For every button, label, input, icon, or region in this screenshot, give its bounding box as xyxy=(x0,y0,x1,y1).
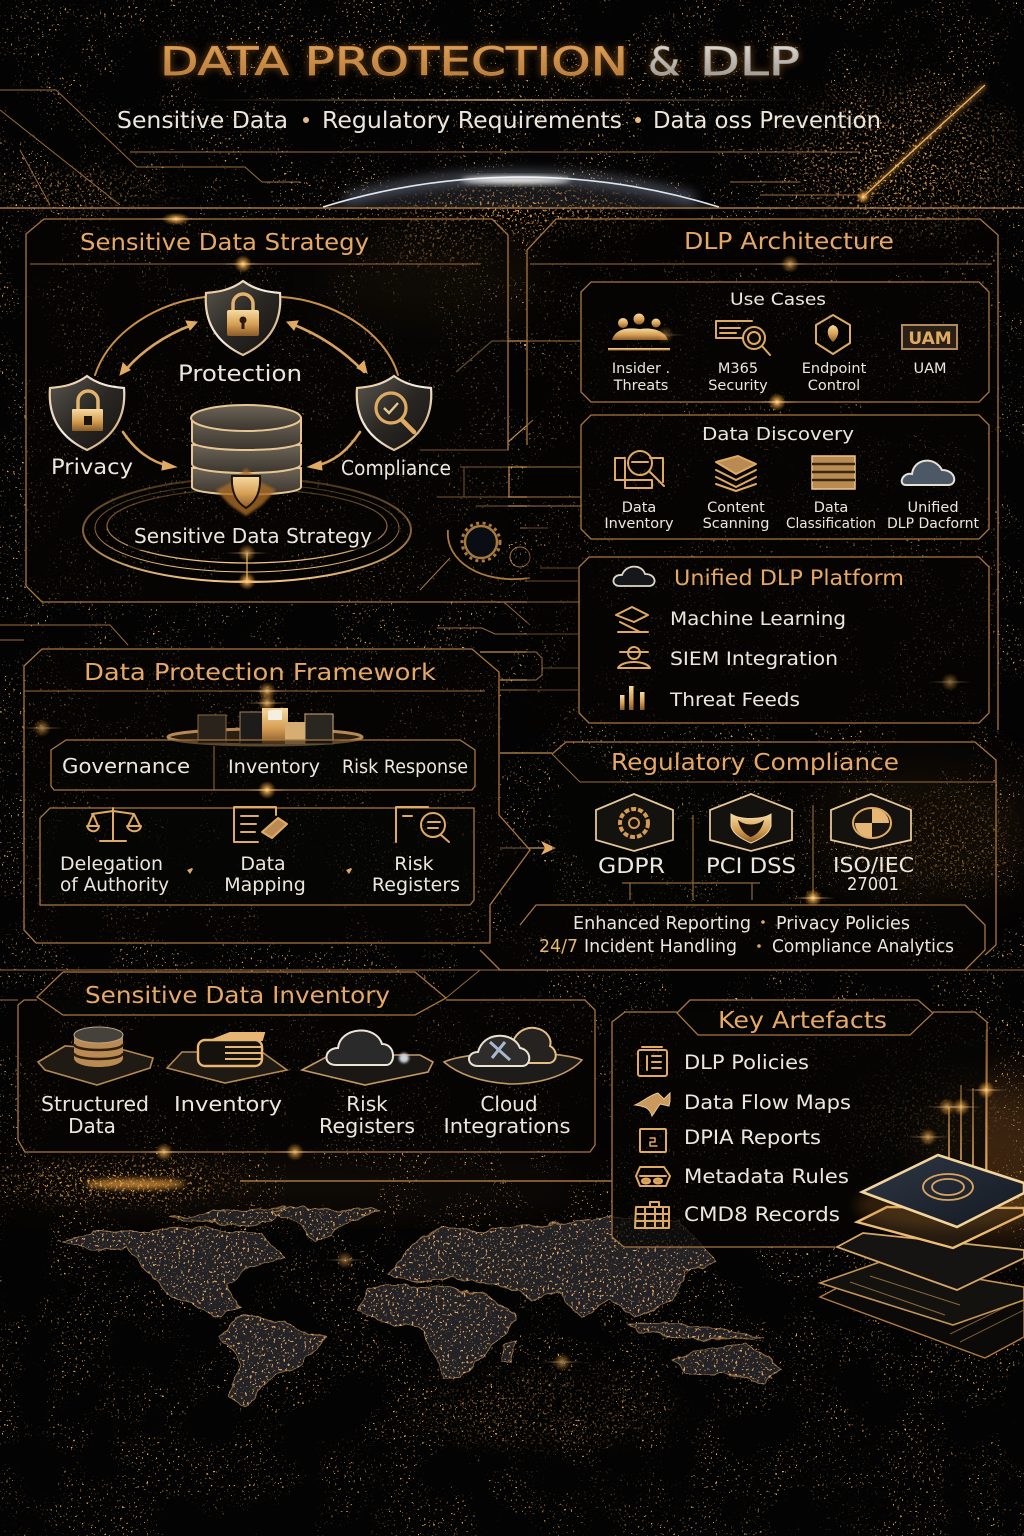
label: insider threats: Insider . xyxy=(612,361,670,377)
icon: insider threats xyxy=(608,314,670,350)
label: insider threats: Threats xyxy=(613,378,668,394)
badge: iso xyxy=(831,794,911,849)
label: gdpr: GDPR xyxy=(598,854,665,878)
label: risk registers: Registers xyxy=(319,1114,415,1138)
subtitle: Data oss Prevention xyxy=(653,108,881,134)
label: iso: ISO/IEC xyxy=(833,853,914,877)
label: risk registers: Risk xyxy=(394,853,434,875)
label: inventory: Inventory xyxy=(228,756,320,778)
icon: database xyxy=(191,405,301,494)
label: data classification: Classification xyxy=(786,516,876,532)
label: policies: DLP Policies xyxy=(684,1051,809,1074)
icon: privacy shield xyxy=(50,376,124,450)
icon: clouds on plinth xyxy=(444,1028,582,1084)
circuit lines xyxy=(0,90,1024,1181)
icon: database on plinth xyxy=(38,1027,153,1085)
eurasia xyxy=(388,1217,714,1317)
label: delegation: of Authority xyxy=(60,874,169,896)
title: DATA PROTECTION xyxy=(160,40,628,85)
text: second line xyxy=(539,937,954,957)
arrow: framework to compliance xyxy=(541,841,556,855)
icon: cloud xyxy=(902,461,954,485)
label: privacy: Privacy xyxy=(51,455,133,479)
label: data inventory: Inventory xyxy=(604,516,674,532)
heading: Key Artefacts xyxy=(718,1008,887,1034)
icon: dpia xyxy=(640,1129,666,1152)
label: unified: DLP Dacfornt xyxy=(887,516,979,532)
icon: uam badge xyxy=(902,325,957,349)
subpanel: unified dlp platform xyxy=(579,557,989,723)
label: risk registers: Registers xyxy=(372,874,460,896)
layer 3 xyxy=(837,1233,1024,1290)
text: second line: Incident Handling xyxy=(584,937,737,957)
layer 4 xyxy=(820,1262,1024,1325)
heading: Sensitive Data Inventory xyxy=(85,983,390,1009)
title: DLP xyxy=(700,40,800,85)
icon: cloud xyxy=(613,567,655,586)
layer 1 xyxy=(862,1155,1024,1227)
heading: Unified DLP Platform xyxy=(674,566,904,590)
islands xyxy=(503,1323,765,1362)
icon: endpoint xyxy=(816,315,850,354)
cycle arrows xyxy=(95,297,398,470)
subpanel: use cases xyxy=(581,282,989,411)
heading: DLP Architecture xyxy=(684,229,894,255)
heading: Data Protection Framework xyxy=(84,660,437,686)
illustration: document stacks xyxy=(168,694,362,745)
label: metadata: Metadata Rules xyxy=(684,1165,849,1188)
icon: metadata xyxy=(636,1167,670,1186)
label: content scanning: Scanning xyxy=(703,516,769,532)
text: first line xyxy=(573,914,910,934)
label: m365: Security xyxy=(708,378,768,394)
label: content scanning: Content xyxy=(707,500,765,516)
icon: machine learning xyxy=(616,607,648,632)
heading: Regulatory Compliance xyxy=(611,750,899,776)
icon: gear xyxy=(420,523,530,590)
icon: siem xyxy=(618,647,650,668)
label: 27001: 27001 xyxy=(847,874,899,895)
text: second line: Compliance Analytics xyxy=(772,937,954,957)
south america xyxy=(219,1315,325,1407)
text: second line: 24/7 xyxy=(539,937,578,957)
label: uam: UAM xyxy=(913,361,947,377)
row: governance, inventory, risk response xyxy=(51,740,475,799)
text: first line: Privacy Policies xyxy=(776,914,910,934)
panel: data protection framework xyxy=(24,649,530,943)
label: structured data: Data xyxy=(68,1114,116,1138)
icon: cloud on plinth xyxy=(302,1031,433,1085)
comet streak xyxy=(856,85,985,204)
label: cmdb: CMD8 Records xyxy=(684,1203,840,1226)
decorative sparks xyxy=(20,326,972,1371)
icon: database badge xyxy=(216,468,276,516)
earth horizon xyxy=(323,176,719,272)
subtitle: Regulatory Requirements xyxy=(322,108,622,134)
icon: threat feeds xyxy=(620,686,644,710)
icon: m365 xyxy=(716,321,770,355)
panel: sensitive data inventory xyxy=(18,972,595,1161)
icon: data inventory xyxy=(615,451,664,488)
orbit rings xyxy=(83,478,411,582)
icon: book on plinth xyxy=(167,1033,287,1083)
subtitle xyxy=(117,108,881,134)
icon: scales xyxy=(87,808,141,841)
label: machine learning: Machine Learning xyxy=(670,608,846,630)
subtitle: Sensitive Data xyxy=(117,108,288,134)
australia xyxy=(673,1343,780,1385)
panel: regulatory compliance xyxy=(480,742,996,970)
icon: cmdb xyxy=(635,1202,669,1228)
arctic and greenland xyxy=(168,1207,380,1242)
label: threat feeds: Threat Feeds xyxy=(669,689,800,711)
title xyxy=(160,40,800,85)
panel: key artefacts xyxy=(612,1000,987,1247)
text: first line: Enhanced Reporting xyxy=(573,914,751,934)
label: data inventory: Data xyxy=(622,500,656,516)
label: pci dss: PCI DSS xyxy=(706,854,796,878)
label: cloud integrations: Integrations xyxy=(444,1114,570,1138)
label: centre: Sensitive Data Strategy xyxy=(134,524,372,548)
label: compliance: Compliance xyxy=(341,456,451,480)
label: delegation: Delegation xyxy=(60,853,163,875)
label: endpoint: Endpoint xyxy=(802,361,867,377)
illustration: chip stack xyxy=(820,1030,1024,1358)
layer 5 xyxy=(820,1260,1024,1358)
label: cloud integrations: Cloud xyxy=(480,1092,538,1116)
icon: compliance shield xyxy=(357,376,431,450)
icon: flow maps xyxy=(635,1093,670,1116)
subpanel: data discovery xyxy=(581,415,989,539)
title: & xyxy=(648,40,680,85)
label: unified: Unified xyxy=(907,500,959,516)
label: flow maps: Data Flow Maps xyxy=(684,1091,851,1114)
label: data mapping: Data xyxy=(240,853,286,875)
badge: gdpr xyxy=(596,794,673,851)
north america xyxy=(64,1228,286,1317)
icon: policies xyxy=(638,1047,667,1076)
label: governance: Governance xyxy=(62,754,190,778)
icon: uam badge: UAM xyxy=(908,329,952,349)
label: protection: Protection xyxy=(178,362,302,387)
label: risk registers: Risk xyxy=(346,1092,388,1116)
icon: risk register xyxy=(396,807,449,842)
label: siem: SIEM Integration xyxy=(670,648,838,670)
callout: capabilities xyxy=(480,905,985,970)
badge: pci dss xyxy=(710,794,792,851)
panel: dlp architecture xyxy=(527,219,998,730)
icon: content scanning xyxy=(716,456,756,491)
label: m365: M365 xyxy=(718,361,758,377)
row: delegation, mapping, registers xyxy=(40,807,474,905)
label: data mapping: Mapping xyxy=(224,874,306,896)
icon: protection shield xyxy=(206,281,280,355)
label: dpia: DPIA Reports xyxy=(684,1126,821,1149)
icon: data classification xyxy=(812,456,855,489)
label: risk response: Risk Response xyxy=(342,757,468,778)
label: inventory: Inventory xyxy=(174,1092,282,1116)
heading: Sensitive Data Strategy xyxy=(80,230,369,256)
label: structured data: Structured xyxy=(41,1092,149,1116)
label: data classification: Data xyxy=(814,500,848,516)
layer 2 xyxy=(857,1207,1024,1248)
africa xyxy=(360,1285,515,1377)
panel: sensitive data strategy xyxy=(26,213,580,602)
world map xyxy=(64,1207,780,1407)
label: endpoint: Control xyxy=(808,378,860,394)
heading: Use Cases xyxy=(730,290,826,310)
icon: data mapping xyxy=(234,807,287,842)
heading: Data Discovery xyxy=(702,424,854,445)
